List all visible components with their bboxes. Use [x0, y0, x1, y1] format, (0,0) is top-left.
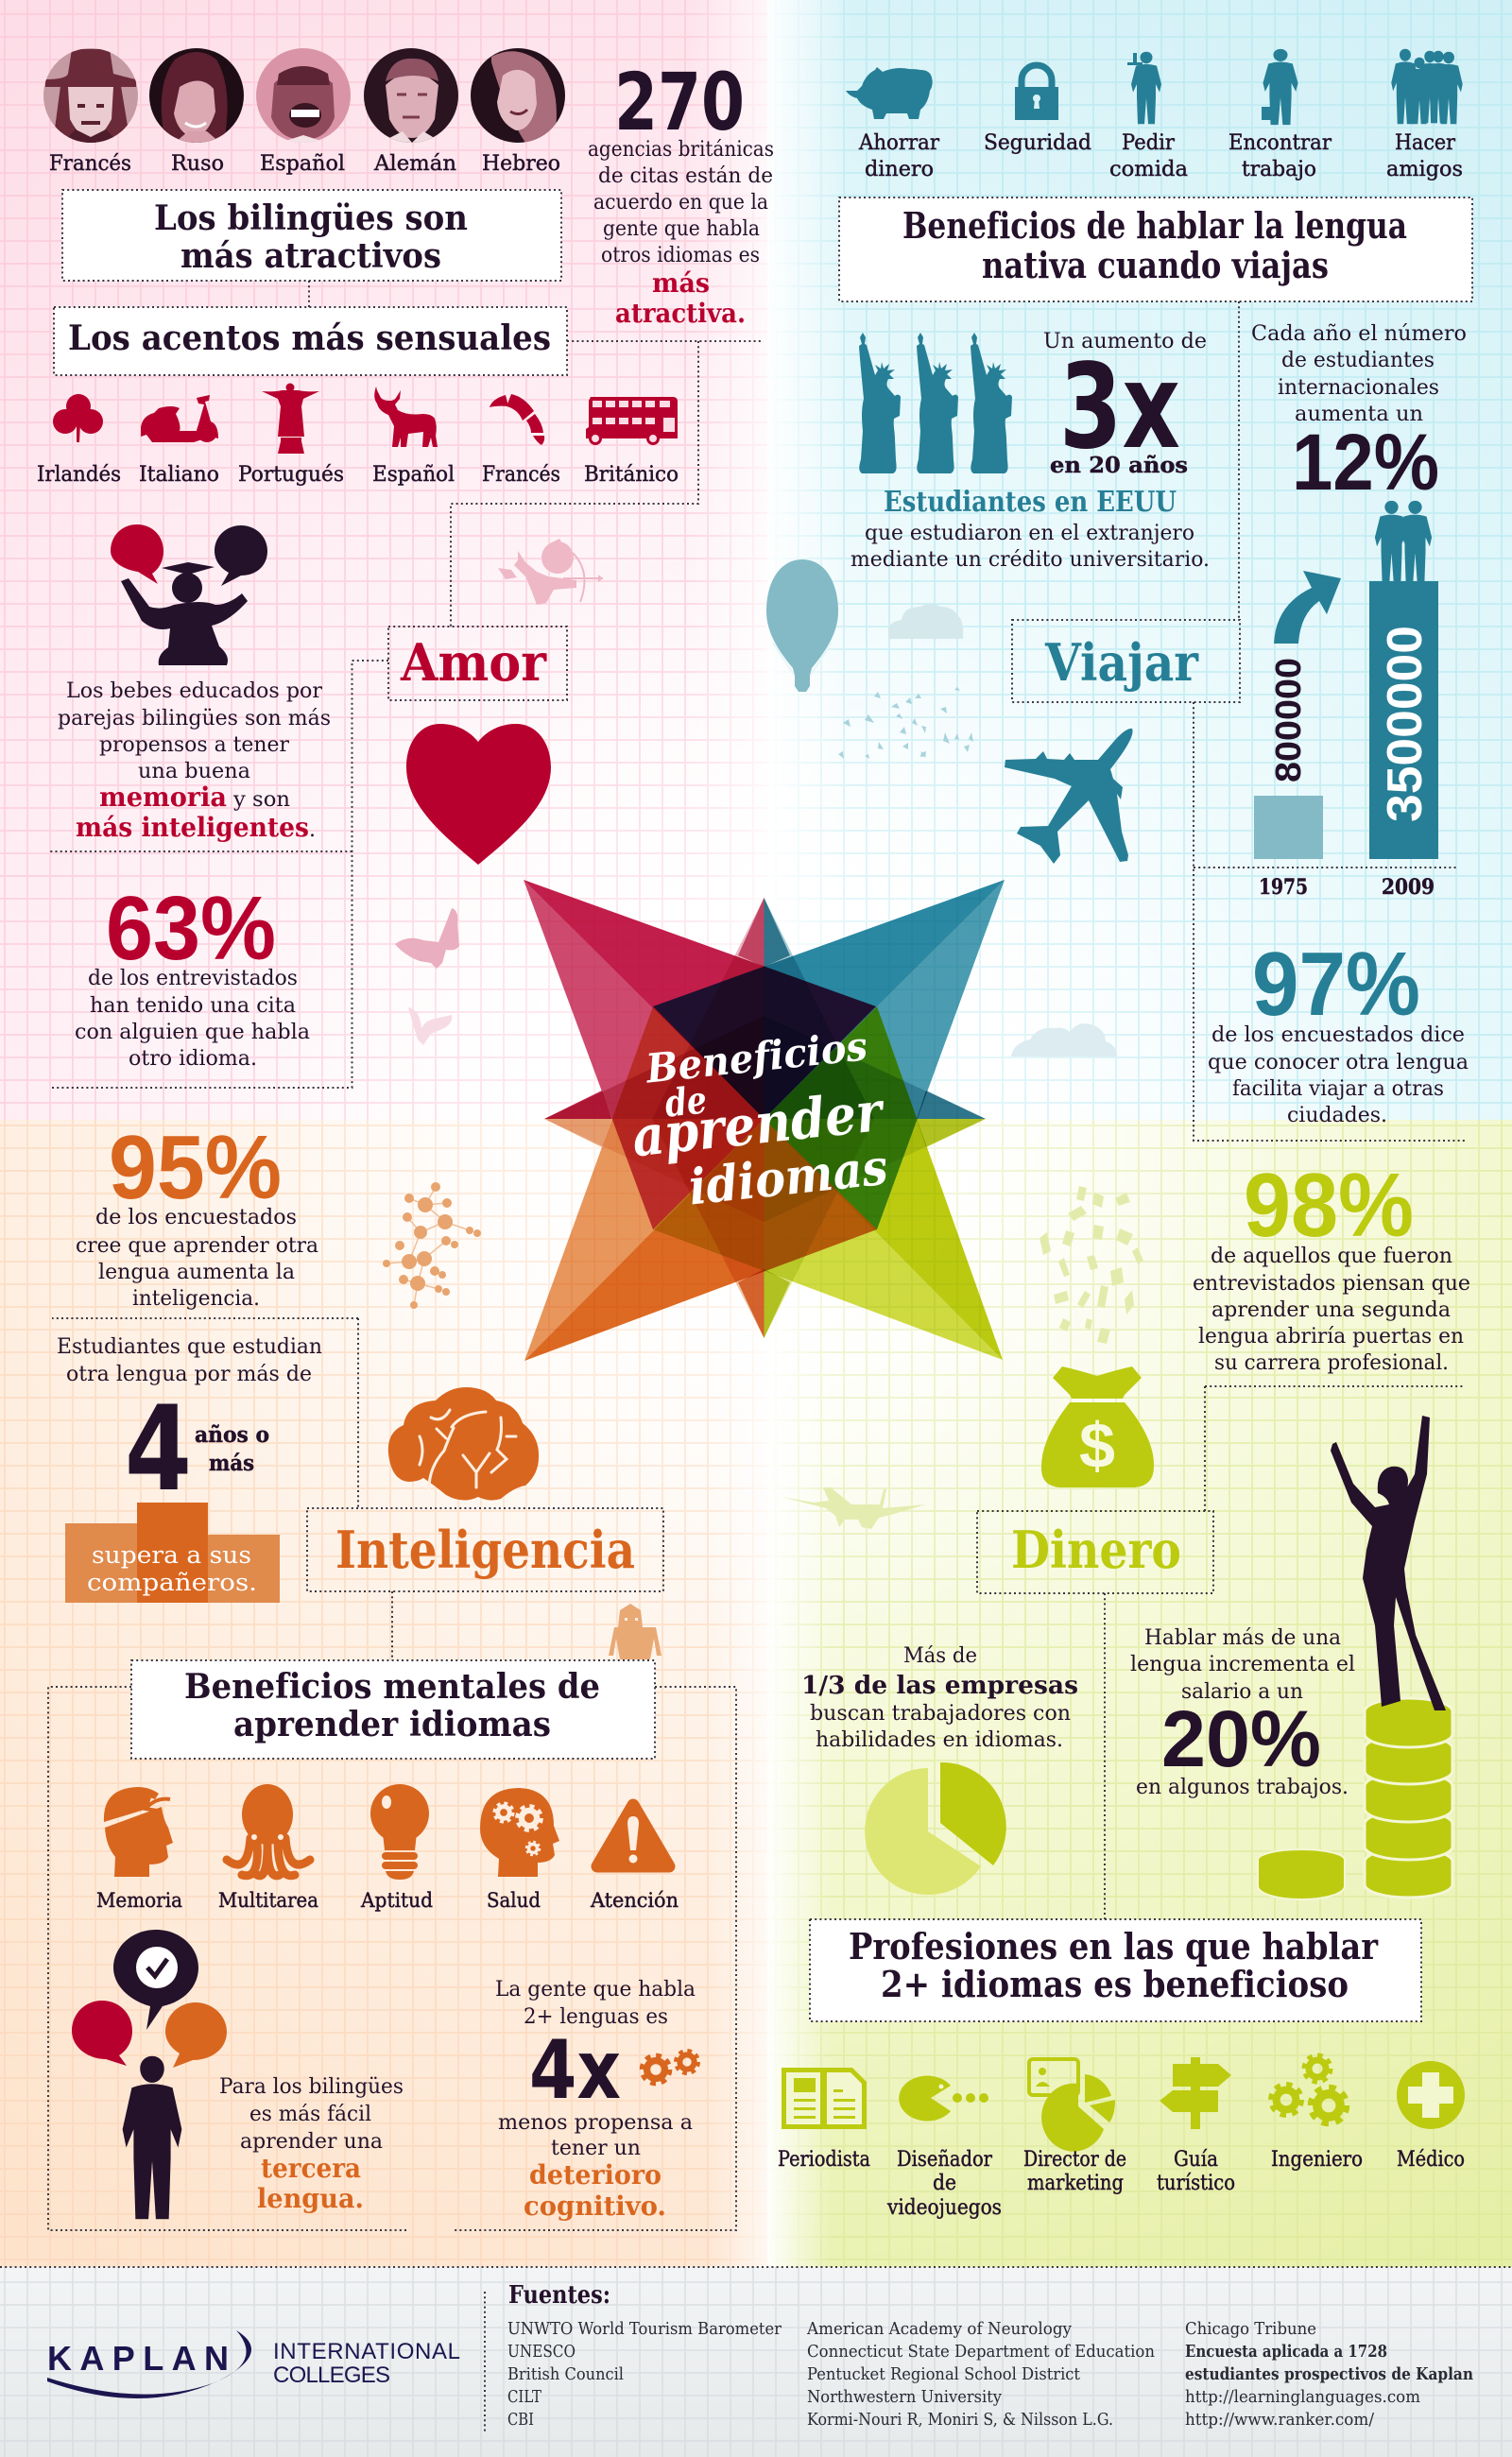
- text: bilingual babies: [58, 679, 331, 843]
- heading: Profesiones: [810, 1919, 1421, 2021]
- mental benefit labels: [96, 1889, 679, 1912]
- mental benefit labels: Atención: [590, 1889, 679, 1912]
- stat: 4x: 4x: [529, 2023, 621, 2118]
- icon: clover: [53, 394, 103, 442]
- star title: Beneficios: [643, 1022, 869, 1092]
- icon: medical cross: [1397, 2061, 1465, 2129]
- text: tercera lengua: es más fácil: [249, 2103, 371, 2126]
- stat: 4x: [495, 1978, 696, 2222]
- stat: 1/3 companies: Más de: [903, 1644, 977, 1668]
- stat: 3x: en 20 años: [1050, 453, 1188, 478]
- icon: croissant: [490, 394, 544, 445]
- sources column 1: CBI: [507, 2410, 534, 2430]
- icon: warning triangle: [597, 1805, 669, 1866]
- category: Dinero: [977, 1511, 1213, 1593]
- travel icon labels: [858, 131, 1463, 181]
- icon: baby with speech bubbles: [111, 524, 267, 665]
- profession labels: turístico: [1157, 2172, 1235, 2195]
- heading: Profesiones: 2+ idiomas es beneficioso: [881, 1963, 1349, 2005]
- travel icon labels: Hacer: [1395, 131, 1455, 155]
- stat: 12%: de estudiantes: [1281, 349, 1435, 372]
- travel icons: [846, 49, 1463, 125]
- portrait labels: Español: [260, 152, 345, 176]
- icon: airplane: [1005, 729, 1133, 864]
- icon: birds flock: [838, 687, 973, 759]
- icon: pale plane: [782, 1487, 926, 1529]
- text: bilingual babies: y son: [232, 788, 290, 812]
- stat: 98%: 98%: [1244, 1155, 1414, 1256]
- profession icons: [782, 2055, 1465, 2152]
- stat: 95%: lengua aumenta la: [98, 1261, 295, 1284]
- stat: 270 agencies: más: [652, 267, 710, 299]
- stat: 12%: aumenta un: [1295, 403, 1423, 426]
- sources column 1: CILT: [507, 2387, 541, 2407]
- profession labels: de: [933, 2172, 956, 2195]
- travel icon labels: comida: [1109, 158, 1188, 181]
- text: tercera lengua: tercera: [261, 2153, 361, 2184]
- travel icon labels: trabajo: [1242, 158, 1316, 181]
- travel icon labels: Seguridad: [984, 131, 1091, 155]
- category: Viajar: [1012, 620, 1240, 702]
- travel icon labels: dinero: [865, 158, 934, 181]
- stat: 270 agencies: acuerdo en que la: [593, 191, 768, 215]
- star title: idiomas: [686, 1139, 890, 1216]
- stat: 4x: cognitivo.: [524, 2191, 666, 2222]
- sources column 1: UNESCO: [507, 2342, 576, 2362]
- sources column 2: American Academy of Neurology: [806, 2319, 1073, 2339]
- accent icons: [53, 384, 678, 454]
- stat: 20%: 20%: [1161, 1694, 1321, 1783]
- icon: newspaper: [782, 2068, 867, 2129]
- stat: 12%: Cada año el número: [1251, 322, 1467, 346]
- icon: bull: [374, 387, 438, 447]
- icon: robot: [609, 1604, 662, 1659]
- stat: 3x: 3x: [1059, 339, 1180, 475]
- icon: small butterfly: [408, 1007, 452, 1045]
- sources column 3: Chicago Tribune: [1185, 2319, 1316, 2339]
- portrait labels: Hebreo: [482, 152, 560, 176]
- stat: 270 agencies: de citas están de: [598, 164, 773, 188]
- stat: 20%: Hablar más de una: [1144, 1626, 1341, 1650]
- icon: hot air balloon: [766, 559, 838, 692]
- accent labels: [37, 463, 679, 487]
- stat: 63%: [75, 878, 310, 1071]
- text: 4 years of study: más: [209, 1451, 254, 1476]
- icon: pacman: [899, 2075, 988, 2121]
- travel icon labels: Pedir: [1122, 131, 1175, 155]
- stat: 98%: de aquellos que fueron: [1211, 1245, 1452, 1268]
- heading: Beneficios de hablar la lengua: nativa cuando viajas: [982, 244, 1329, 286]
- sources: [507, 2281, 1473, 2430]
- portrait labels: Francés: [49, 152, 131, 176]
- stat: 97%: que conocer otra lengua: [1208, 1051, 1469, 1074]
- category: Dinero: Dinero: [1011, 1520, 1181, 1580]
- category: Inteligencia: Inteligencia: [335, 1520, 635, 1580]
- icon: pale cloud: [1011, 1023, 1117, 1057]
- central star: [524, 880, 1005, 1361]
- portraits row: [43, 48, 565, 143]
- sources: Fuentes:: [508, 2281, 610, 2310]
- stat: 1/3 companies: [801, 1644, 1078, 1752]
- sources column 1: [507, 2319, 782, 2430]
- stat: 63%: de los entrevistados: [88, 967, 298, 990]
- heading: Beneficios de hablar la lengua: Beneficios de hablar la lengua: [902, 204, 1407, 247]
- star title: de: [662, 1077, 709, 1126]
- travel icon labels: Ahorrar: [858, 131, 939, 155]
- icon: small gears: [642, 2051, 698, 2084]
- profession labels: Ingeniero: [1271, 2148, 1363, 2172]
- icon: head with gears: [480, 1788, 559, 1877]
- accent labels: Irlandés: [37, 463, 121, 487]
- bar chart: international students: 1975: [1259, 875, 1308, 900]
- accent labels: Portugués: [238, 463, 344, 487]
- icon: growth arrow: [1274, 571, 1341, 644]
- icon: butterfly: [395, 908, 459, 969]
- stat: 98%: su carrera profesional.: [1214, 1351, 1449, 1375]
- travel icon labels: amigos: [1386, 158, 1463, 181]
- portrait labels: Ruso: [171, 152, 224, 176]
- text: Estudiantes en EEUU: que estudiaron en el extranjero: [865, 522, 1194, 545]
- portrait: Alemán: [364, 48, 458, 143]
- text: bilingual babies: una buena: [138, 760, 250, 783]
- stat: 97%: ciudades.: [1287, 1104, 1387, 1127]
- heading: Beneficios de hablar la lengua: [839, 198, 1472, 301]
- icon: businessman: [1262, 49, 1298, 125]
- stat: 95%: cree que aprender otra: [76, 1234, 318, 1258]
- stat: 20%: en algunos trabajos.: [1136, 1776, 1349, 1799]
- accent labels: Español: [372, 463, 455, 487]
- stat: 97%: de los encuestados dice: [1211, 1023, 1465, 1047]
- icon: statues of liberty: [859, 333, 1012, 473]
- icon: memory head: [104, 1787, 173, 1877]
- stat: 4x: 2+ lenguas es: [524, 2005, 668, 2029]
- portrait: Ruso: [149, 48, 244, 143]
- icon: money bag: [1041, 1366, 1154, 1487]
- stat: 12%: [1251, 322, 1467, 507]
- portrait: Español: [256, 48, 351, 143]
- icon: woman on coins: [1331, 1416, 1452, 1898]
- stat: 4x: La gente que habla: [495, 1978, 696, 2002]
- podium: [65, 1503, 280, 1603]
- sources column 3: [1185, 2319, 1473, 2430]
- icon: signpost: [1160, 2057, 1231, 2129]
- podium: compañeros.: [87, 1569, 257, 1596]
- sources column 3: http://learninglanguages.com: [1185, 2387, 1420, 2407]
- portrait: Hebreo: [471, 48, 565, 143]
- text: Estudiantes en EEUU: [850, 486, 1210, 572]
- profession labels: Diseñador: [897, 2148, 992, 2172]
- text: bilingual babies: propensos a tener: [99, 733, 289, 757]
- text: 4 years of study: Estudiantes que estudian: [57, 1335, 322, 1359]
- stat: 98%: lengua abriría puertas en: [1198, 1325, 1464, 1349]
- text: bilingual babies: memoria: [99, 782, 227, 813]
- stat: 270 agencies: gente que habla: [603, 217, 760, 241]
- icon: brain: [388, 1387, 539, 1501]
- icon: couple: [1375, 501, 1432, 582]
- icon: flying bills: [1040, 1186, 1143, 1344]
- stat: 98%: entrevistados piensan que: [1193, 1272, 1470, 1296]
- heading: Profesiones: Profesiones en las que hablar: [849, 1925, 1379, 1967]
- heading: Los bilingües son más atractivos: Los bilingües son: [154, 198, 468, 238]
- heading: Los bilingües son más atractivos: más atractivos: [180, 236, 441, 276]
- portrait: Francés: [43, 48, 138, 143]
- sources column 2: Pentucket Regional School District: [807, 2364, 1081, 2384]
- heading: Los acentos más sensuales: [54, 307, 567, 375]
- profession labels: Guía: [1174, 2148, 1218, 2172]
- star title: aprender: [629, 1079, 888, 1169]
- profession labels: marketing: [1027, 2172, 1124, 2195]
- stat: 95%: de los encuestados: [95, 1206, 297, 1229]
- sources column 2: [806, 2319, 1155, 2430]
- stat: 97%: 97%: [1252, 934, 1420, 1035]
- icon: money bag: $: [1079, 1410, 1115, 1482]
- Kaplan logo: COLLEGES: [273, 2362, 390, 2388]
- icon: gears: [1271, 2055, 1347, 2123]
- accent labels: Francés: [482, 463, 560, 487]
- bar chart: international students: 3500000: [1378, 626, 1433, 822]
- stat: 95%: inteligencia.: [132, 1287, 260, 1311]
- stat: 4x: deterioro: [529, 2159, 662, 2191]
- text: 4 years of study: otra lengua por más de: [66, 1363, 312, 1386]
- stat: 270 agencies: agencias británicas: [588, 138, 774, 162]
- profession labels: Director de: [1023, 2148, 1126, 2172]
- stat: 1/3 companies: habilidades en idiomas.: [816, 1728, 1063, 1752]
- star title: [623, 1022, 894, 1222]
- profession labels: Médico: [1397, 2148, 1465, 2172]
- text: 4 years of study: [57, 1335, 322, 1518]
- stat: 1/3 companies: 1/3 de las empresas: [801, 1672, 1078, 1700]
- icon: cupid: [498, 539, 603, 605]
- stat: 12%: 12%: [1292, 418, 1439, 507]
- icon: neural network: [383, 1182, 481, 1309]
- category: Inteligencia: [307, 1508, 663, 1591]
- stat: 98%: [1193, 1155, 1470, 1375]
- profession labels: videojuegos: [886, 2196, 1002, 2220]
- stat: 97%: [1208, 934, 1469, 1127]
- stat: 12%: internacionales: [1278, 376, 1439, 400]
- stat: 95%: [76, 1117, 318, 1311]
- mental benefit labels: Multitarea: [218, 1889, 318, 1912]
- icon: light bulb: [370, 1784, 429, 1880]
- bar chart: international students: 800000: [1269, 658, 1309, 782]
- text: bilingual babies: parejas bilingües son más: [58, 707, 331, 730]
- stat: 1/3 companies: buscan trabajadores con: [810, 1702, 1071, 1726]
- Kaplan logo: [47, 2330, 460, 2398]
- icon: padlock: [1015, 65, 1058, 120]
- heading: Beneficios mentales: aprender idiomas: [233, 1705, 551, 1744]
- icon: person with speech bubbles: [72, 1930, 227, 2219]
- icon: scooter: [141, 395, 218, 442]
- mental benefit labels: Memoria: [96, 1889, 182, 1912]
- sources column 3: Encuesta aplicada a 1728: [1185, 2342, 1387, 2362]
- sources column 1: UNWTO World Tourism Barometer: [507, 2319, 782, 2339]
- sources column 2: Connecticut State Department of Education: [807, 2342, 1155, 2362]
- footer background: [0, 2267, 1512, 2457]
- portrait labels: Alemán: [373, 152, 456, 176]
- icon: waiter: [1127, 52, 1161, 124]
- mental benefit labels: Aptitud: [360, 1889, 433, 1912]
- stat: 63%: otro idioma.: [129, 1047, 257, 1071]
- icon: group of friends: [1391, 49, 1463, 124]
- sources column 1: British Council: [507, 2364, 624, 2384]
- heading: Los acentos más sensuales: Los acentos más sensuales: [68, 318, 551, 358]
- stat: 3x: Un aumento de: [1043, 330, 1207, 353]
- text: 4 years of study: años o: [195, 1422, 269, 1448]
- icon: Christ the Redeemer: [262, 384, 319, 454]
- travel icon labels: Encontrar: [1228, 131, 1332, 155]
- icon: octopus: [227, 1784, 310, 1876]
- Kaplan logo: INTERNATIONAL: [273, 2339, 460, 2364]
- stat: 20%: lengua incrementa el: [1130, 1653, 1355, 1676]
- text: tercera lengua: lengua.: [257, 2183, 364, 2214]
- stat: 98%: aprender una segunda: [1211, 1298, 1451, 1322]
- Kaplan logo: KAPLAN: [47, 2339, 229, 2378]
- stat: 63%: 63%: [106, 878, 276, 979]
- stat: 4x: menos propensa a: [498, 2111, 693, 2135]
- text: tercera lengua: aprender una: [240, 2130, 383, 2154]
- sources column 3: http://www.ranker.com/: [1185, 2410, 1375, 2430]
- icon: cloud: [888, 604, 963, 639]
- bar chart: international students: [1254, 501, 1438, 900]
- icon: double-decker bus: [586, 397, 678, 444]
- stat: 270 agencies: atractiva.: [615, 298, 746, 329]
- icon: piggy bank: [846, 67, 933, 119]
- text: bilingual babies: más inteligentes: [76, 812, 309, 843]
- text: bilingual babies: .: [309, 818, 316, 842]
- text: tercera lengua: Para los bilingües: [219, 2075, 404, 2099]
- stat: 270 agencies: otros idiomas es: [601, 244, 760, 267]
- category: Amor: Amor: [400, 632, 547, 693]
- stat: 97%: facilita viajar a otras: [1232, 1077, 1444, 1101]
- accent labels: Británico: [584, 463, 679, 487]
- sources column 2: Northwestern University: [807, 2387, 1003, 2407]
- pie chart: [865, 1762, 1006, 1895]
- heading: Los bilingües son más atractivos: [62, 190, 561, 281]
- icon: single coin: [1258, 1849, 1345, 1899]
- podium: supera a sus: [92, 1541, 251, 1569]
- text: bilingual babies: Los bebes educados por: [66, 679, 322, 703]
- icon: marketing chart: [1029, 2059, 1115, 2152]
- text: 4 years of study: 4: [125, 1382, 192, 1518]
- heading: Beneficios mentales: [131, 1660, 655, 1759]
- bar chart: international students: 2009: [1382, 875, 1435, 900]
- profession labels: Periodista: [778, 2148, 870, 2172]
- accent labels: Italiano: [139, 463, 219, 487]
- stat: 270 agencies: [588, 56, 774, 329]
- sources column 2: Kormi-Nouri R, Moniri S, & Nilsson L.G.: [807, 2410, 1113, 2430]
- stat: 63%: han tenido una cita: [90, 994, 296, 1018]
- stat: 4x: tener un: [551, 2137, 641, 2160]
- heading: Beneficios mentales: Beneficios mentales de: [184, 1667, 600, 1707]
- stat: 95%: 95%: [109, 1117, 282, 1218]
- text: Estudiantes en EEUU: Estudiantes en EEUU: [884, 486, 1177, 519]
- stat: 63%: con alguien que habla: [75, 1021, 310, 1044]
- mental benefit icons: [104, 1784, 669, 1880]
- stat: 270 agencies: 270: [614, 56, 745, 148]
- category: Viajar: Viajar: [1044, 632, 1198, 693]
- stat: 20%: salario a un: [1181, 1680, 1303, 1704]
- icon: heart: [406, 724, 551, 865]
- text: tercera lengua: [219, 2075, 404, 2214]
- text: Estudiantes en EEUU: mediante un crédito universitario.: [850, 548, 1210, 572]
- mental benefit labels: Salud: [487, 1889, 541, 1912]
- portrait labels: [49, 152, 560, 176]
- profession labels: [778, 2148, 1465, 2220]
- stat: 20%: [1130, 1626, 1355, 1799]
